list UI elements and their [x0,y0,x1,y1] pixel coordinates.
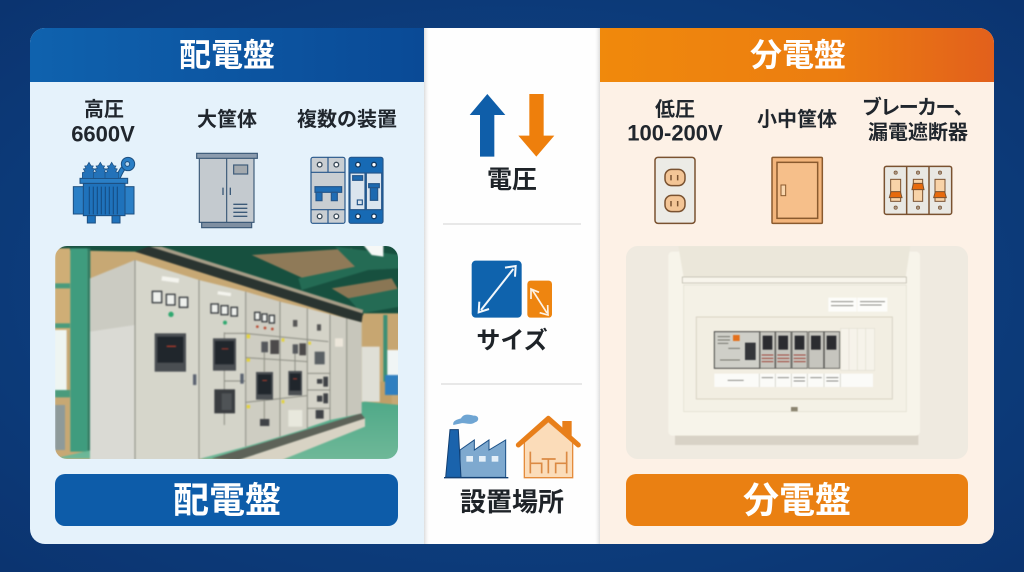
photo: switchgear room [55,246,398,459]
icon: three breakers [884,166,952,214]
button: 分電盤: 分電盤 [743,480,851,520]
icon: large enclosure [197,153,257,228]
label: 低圧 100-200V [627,98,723,146]
icon: house [518,418,578,478]
label: 低圧 100-200V: 100-200V [627,120,723,146]
column: 電圧 [470,94,554,194]
label: 小中筐体: 小中筐体 [757,108,837,131]
label: 複数の装置: 複数の装置 [297,108,397,131]
label: 電圧: 電圧 [487,166,537,194]
label: サイズ: サイズ [476,326,548,354]
button: 配電盤 [55,474,398,526]
header bar: 分電盤 [600,28,994,82]
column: サイズ [472,261,552,354]
heading: 配電盤: 配電盤 [179,37,275,73]
header bar: 配電盤 [30,28,424,82]
icon: factory [444,415,508,478]
button: 配電盤: 配電盤 [173,480,281,520]
icon: small cabinet door [772,157,822,223]
label: 大筐体: 大筐体 [197,108,257,131]
label: 高圧 6600V [71,98,135,146]
icon: size boxes [472,261,552,318]
icon: multiple breakers [311,157,383,223]
panel: 配電盤 background [30,28,424,544]
button: 分電盤 [626,474,968,526]
label: ブレーカー、漏電遮断器 [862,95,972,144]
column: 設置場所 [444,415,578,517]
photo: distribution board [626,246,968,459]
panel: 分電盤 background [600,28,994,544]
label: ブレーカー、漏電遮断器: 漏電遮断器 [868,121,968,144]
label: ブレーカー、漏電遮断器: ブレーカー、 [862,95,972,119]
icon: voltage arrows [470,94,554,157]
label: 低圧 100-200V: 低圧 [655,98,695,121]
label: 高圧 6600V: 高圧 [84,98,124,121]
label: 高圧 6600V: 6600V [71,122,135,146]
heading: 分電盤: 分電盤 [750,37,846,73]
icon: transformer [73,157,135,223]
icon: outlet [655,157,695,223]
panel: comparison column background [424,28,600,544]
label: 設置場所: 設置場所 [460,487,564,517]
